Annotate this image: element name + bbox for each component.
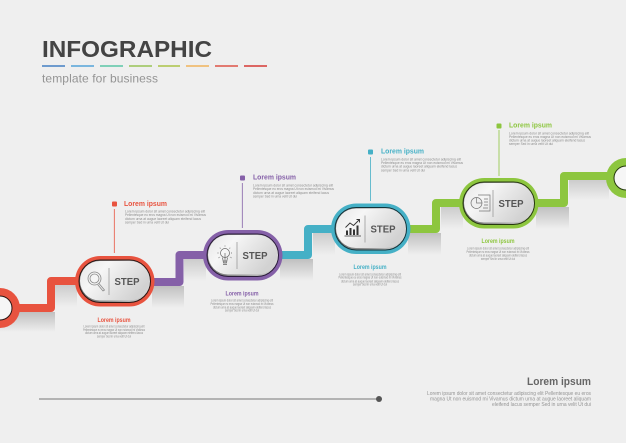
callout top: green: Lorem ipsum dolor sit amet consectetur adipiscing elit [509,130,590,136]
callout bottom: green: semper Sed in urna velit Ut dui [481,256,515,261]
callout bottom: green [466,239,530,261]
callout top: teal: Lorem ipsum dolor sit amet consectetur adipiscing elit [381,156,462,162]
step 4 [459,178,538,228]
callout bottom: teal: Pellentesque eu eros magna Ut non euismod mi Vivamus [338,274,402,280]
callout top: purple: Lorem ipsum [253,174,296,182]
callout top: red: Pellentesque eu eros magna Ut non euismod mi Vivamus [125,212,206,217]
callout top: purple: Pellentesque eu eros magna Ut non euismod mi Vivamus [253,186,334,191]
callout top: purple: semper Sed in urna velit Ut dui [253,194,297,198]
footer text block: eleifend lacus semper Sed in urna velit Ut dui [492,402,591,408]
callout bottom: purple [210,292,274,312]
callout bottom: red: Pellentesque eu eros magna Ut non euismod mi Vivamus [83,327,145,332]
step 1 [75,256,154,306]
footer text block: magna Ut non euismod mi Vivamus dictum urna at augue laoreet aliquam [430,396,591,402]
callout top: green: Lorem ipsum [509,122,552,130]
callout bottom: purple: Lorem ipsum [226,292,258,298]
divider [236,242,238,269]
callout top: green: dictum urna at augue laoreet aliquam eleifend lacus [509,138,585,142]
timeline segment: green [400,203,480,229]
step label: STEP [498,199,524,210]
pill: purple [203,230,282,280]
callout top: teal: Lorem ipsum [381,148,424,156]
callout bottom: teal: dictum urna at augue laoreet aliquam eleifend lacus [341,278,399,284]
callout top: green: semper Sed in urna velit Ut dui [509,141,553,146]
callout top: red: Lorem ipsum [124,201,167,208]
pill: teal [331,204,410,254]
callout bottom: purple: semper Sed in urna velit Ut dui [225,308,259,312]
icon: magnifier [88,272,104,291]
step label: STEP [114,277,140,288]
callout top: green: Pellentesque eu eros magna Ut non euismod mi Vivamus [509,134,591,139]
callout top: purple: dictum urna at augue laoreet aliquam eleifend lacus [253,190,329,195]
end node [606,158,626,198]
callout bottom: teal: Lorem ipsum dolor sit amet consectetur adipiscing elit [339,272,402,276]
divider [364,216,366,242]
callout top: purple [240,174,334,228]
timeline segment: red [0,281,90,308]
step 2 [203,230,282,280]
footer text block [427,376,591,408]
icon: light bulb [218,246,232,264]
progress line [39,396,382,402]
pill: green [459,178,538,228]
callout bottom: green: Lorem ipsum [482,239,514,245]
callout top: red [112,201,206,253]
callout bottom: purple: Lorem ipsum dolor sit amet consectetur adipiscing elit [211,298,274,302]
callout bottom: purple: Pellentesque eu eros magna Ut non euismod mi Vivamus [210,301,274,306]
footer text block: Lorem ipsum dolor sit amet consectetur adipiscing elit Pellentesque eu eros [427,391,591,397]
callout bottom: teal: Lorem ipsum [354,265,386,271]
callout bottom: red: semper Sed in urna velit Ut dui [97,334,131,338]
callout top: purple: Lorem ipsum dolor sit amet consectetur adipiscing elit [253,182,334,188]
callout top: green [496,122,591,176]
title: INFOGRAPHIC [42,36,212,62]
callout bottom: teal [338,265,402,286]
callout top: teal: semper Sed in urna velit Ut dui [381,168,425,172]
timeline segment: green end [525,176,615,203]
callout bottom: red: Lorem ipsum [98,318,130,324]
step path shadows [0,180,609,332]
callout top: teal: Pellentesque eu eros magna Ut non euismod mi Vivamus [381,160,463,165]
callout bottom: red: Lorem ipsum dolor sit amet consectetur adipiscing elit [84,324,145,328]
colored dash row [42,65,267,67]
timeline segment: teal [270,229,350,255]
callout bottom: teal: semper Sed in urna velit Ut dui [353,282,387,286]
step label: STEP [370,224,396,235]
divider [108,268,110,295]
subtitle: template for business [42,72,158,86]
callout top: red: semper Sed in urna velit Ut dui [125,220,169,224]
callout top: teal: dictum urna at augue laoreet aliquam eleifend lacus [381,164,457,168]
step 3 [331,204,410,254]
start node [0,288,20,328]
callout top: red: Lorem ipsum dolor sit amet consectetur adipiscing elit [125,208,206,214]
callout top: red: dictum urna at augue laoreet aliquam eleifend lacus [125,216,201,221]
icon: report with pie chart [471,195,490,211]
pill: red [75,256,154,306]
callout bottom: green: Lorem ipsum dolor sit amet consectetur adipiscing elit [467,246,530,250]
footer text block: Lorem ipsum [527,376,591,388]
callout bottom: red: dictum urna at augue laoreet aliquam eleifend lacus [85,330,143,335]
callout bottom: purple: dictum urna at augue laoreet aliquam eleifend lacus [213,304,271,310]
callout bottom: green: Pellentesque eu eros magna Ut non euismod mi Vivamus [466,249,530,254]
callout bottom: red [83,318,145,338]
divider [492,190,494,217]
callout top: teal [368,148,463,201]
step label: STEP [242,251,268,262]
callout bottom: green: dictum urna at augue laoreet aliquam eleifend lacus [469,252,527,258]
icon: rising bar chart [344,220,361,236]
timeline segment: purple [140,255,220,282]
